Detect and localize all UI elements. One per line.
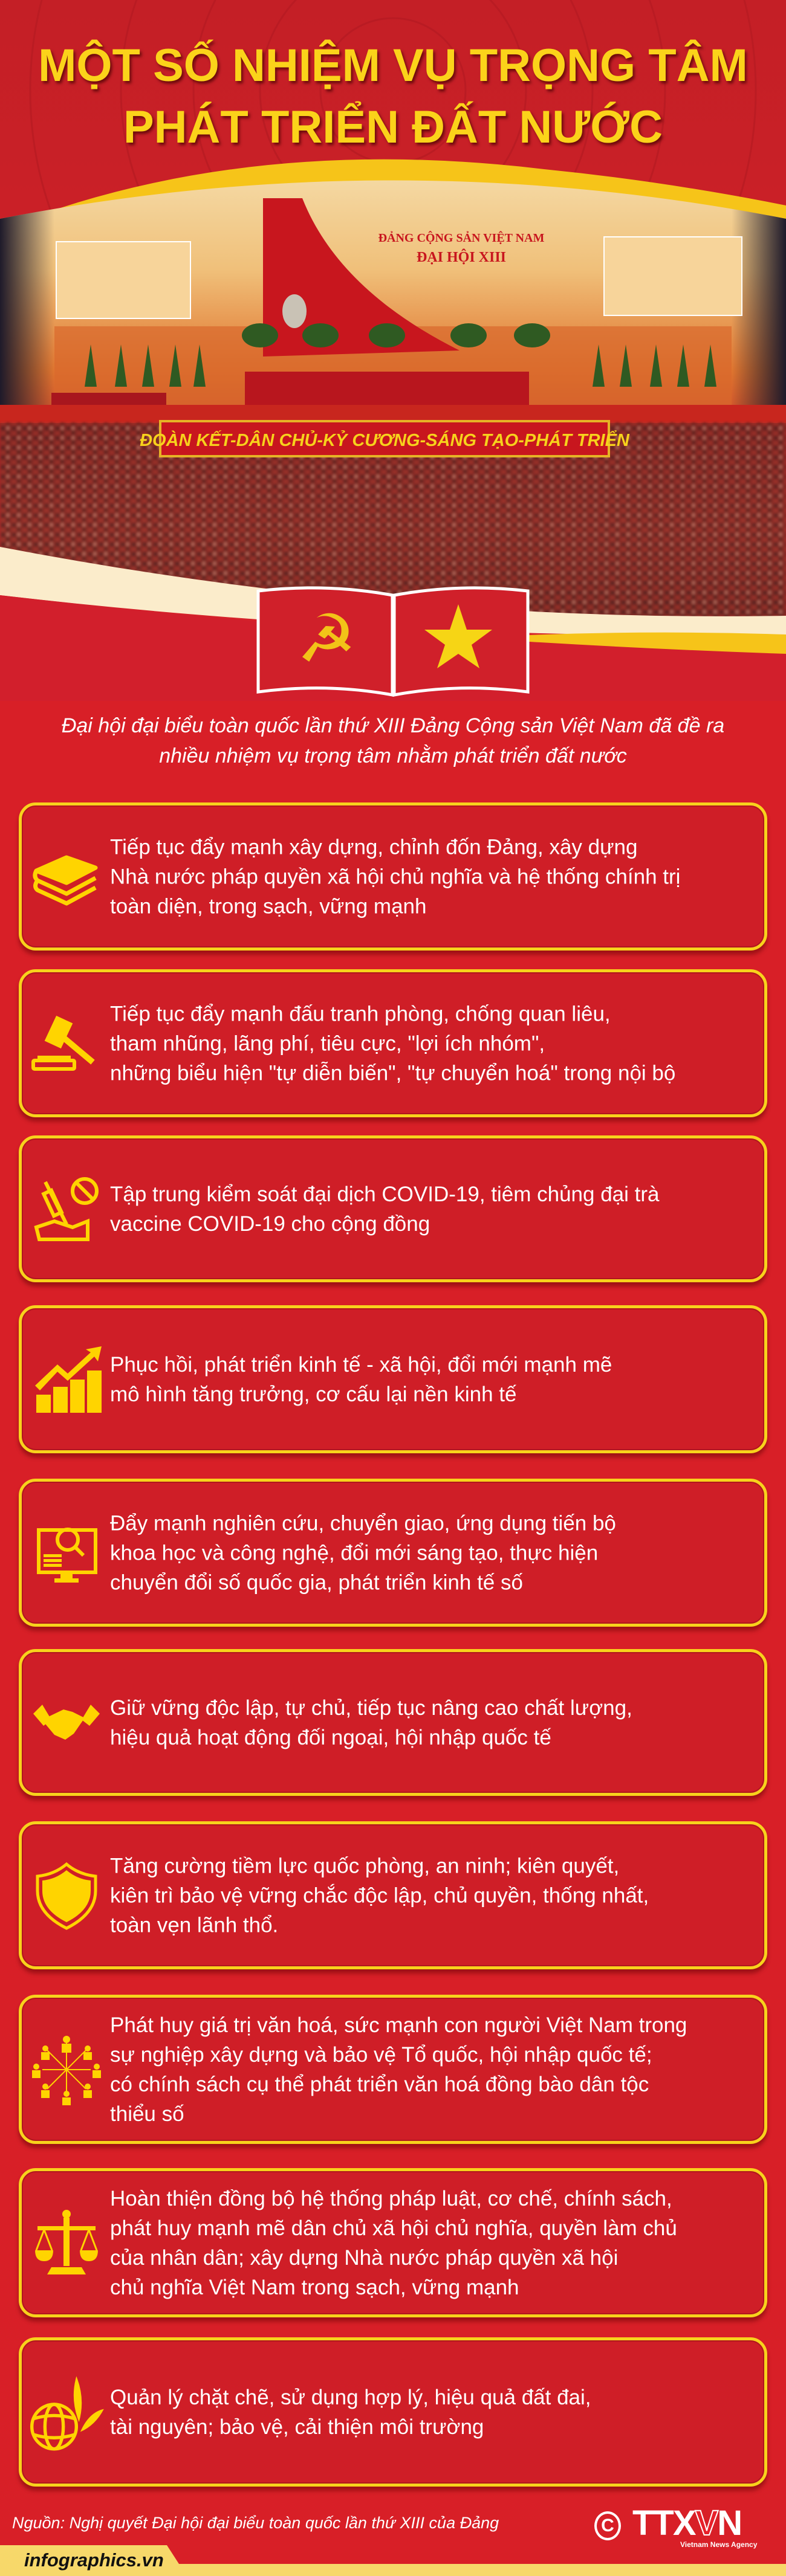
panel: task 3: vaccine COVID-19 cho cộng đồng [110, 1212, 430, 1235]
panel: task 8: sự nghiệp xây dựng và bảo vệ Tổ quốc, hội nhập quốc tế; [110, 2042, 652, 2067]
footer band: infographics.vn: infographics.vn [24, 2549, 164, 2571]
photo: congress hall [0, 180, 786, 616]
panel: task 8 [19, 1995, 767, 2144]
panel: task 8: có chính sách cụ thể phát triển văn hoá đồng bào dân tộc [110, 2073, 649, 2096]
photo: congress hall: ĐẠI HỘI XIII [417, 250, 506, 265]
icon: people circle [32, 2036, 101, 2105]
subtitle [62, 714, 724, 767]
subtitle: nhiều nhiệm vụ trọng tâm nhằm phát triển đất nước [159, 744, 627, 767]
icon: copyright: C [601, 2516, 614, 2536]
panel: task 5 [19, 1479, 767, 1627]
panel: task 2: tham nhũng, lãng phí, tiêu cực, "lợi ích nhóm", [110, 1031, 545, 1055]
panel: task 6 [19, 1649, 767, 1796]
panel: task 7: Tăng cường tiềm lực quốc phòng, an ninh; kiên quyết, [110, 1854, 619, 1877]
panel: task 1 [19, 802, 767, 951]
icon: scales [35, 2210, 98, 2274]
icon: books [33, 856, 98, 905]
photo: congress hall: ĐẢNG CỘNG SẢN VIỆT NAM [378, 231, 545, 245]
panel: task 4 [19, 1305, 767, 1453]
flag: Vietnam [394, 588, 528, 695]
photo: congress hall: ĐOÀN KẾT-DÂN CHỦ-KỶ CƯƠNG-SÁNG TẠO-PHÁT TRIỂN [140, 429, 630, 450]
icon: handshake [33, 1705, 100, 1740]
panel: task 3: Tập trung kiểm soát đại dịch COVID-19, tiêm chủng đại trà [110, 1182, 659, 1206]
panel: task 6: hiệu quả hoạt động đối ngoại, hội nhập quốc tế [110, 1726, 551, 1749]
header background with photo, swooshes and flags [0, 0, 786, 697]
panel: task 9: phát huy mạnh mẽ dân chủ xã hội chủ nghĩa, quyền làm chủ [110, 2216, 677, 2239]
footer band: infographics.vn [0, 2545, 786, 2576]
panel: task 7: kiên trì bảo vệ vững chắc độc lập, chủ quyền, thống nhất, [110, 1884, 649, 1907]
panel: task 10: tài nguyên; bảo vệ, cải thiện môi trường [110, 2415, 484, 2439]
icon: copyright [594, 2511, 621, 2540]
panel: task 9: của nhân dân; xây dựng Nhà nước pháp quyền xã hội [110, 2245, 618, 2270]
title [38, 40, 749, 153]
panel: task 5: Đẩy mạnh nghiên cứu, chuyển giao, ứng dụng tiến bộ [110, 1511, 616, 1535]
panel: task 4: Phục hồi, phát triển kinh tế - xã hội, đổi mới mạnh mẽ [110, 1352, 612, 1377]
icon: gavel [31, 1015, 95, 1071]
panel: task 7: toàn vẹn lãnh thổ. [110, 1913, 278, 1937]
panel: task 2: Tiếp tục đẩy mạnh đấu tranh phòng, chống quan liêu, [110, 1002, 611, 1025]
panel: task 9 [19, 2168, 767, 2317]
flags [258, 588, 528, 695]
icon: growth chart [35, 1346, 102, 1413]
panel: task 5: chuyển đổi số quốc gia, phát triển kinh tế số [110, 1570, 523, 1594]
icon: computer analytics [37, 1528, 97, 1583]
panel: task 3 [19, 1135, 767, 1282]
panel: task 1: Nhà nước pháp quyền xã hội chủ nghĩa và hệ thống chính trị [110, 865, 680, 888]
panel: task 10: Quản lý chặt chẽ, sử dụng hợp lý, hiệu quả đất đai, [110, 2386, 591, 2409]
yellow arc above photo [0, 160, 786, 254]
panel: task 10 [19, 2337, 767, 2487]
panel: task 7 [19, 1821, 767, 1969]
panel: task 9: chủ nghĩa Việt Nam trong sạch, vững mạnh [110, 2276, 519, 2299]
panel: task 4: mô hình tăng trưởng, cơ cấu lại nền kinh tế [110, 1383, 516, 1406]
panel: task 2 [19, 969, 767, 1117]
cream and yellow swooshes [0, 547, 786, 635]
panel: task 6: Giữ vững độc lập, tự chủ, tiếp tục nâng cao chất lượng, [110, 1696, 632, 1720]
logo: TTXVN [594, 2503, 757, 2549]
panel: task 1: toàn diện, trong sạch, vững mạnh [110, 894, 426, 918]
icon: vaccine [34, 1177, 99, 1241]
icon: shield [36, 1862, 97, 1930]
flag: party [258, 588, 392, 695]
panel: task 2: những biểu hiện "tự diễn biến", "tự chuyển hoá" trong nội bộ [110, 1061, 675, 1085]
title: MỘT SỐ NHIỆM VỤ TRỌNG TÂM [38, 40, 748, 91]
source note: Nguồn: Nghị quyết Đại hội đại biểu toàn quốc lần thứ XIII của Đảng [12, 2514, 499, 2532]
flag: party: ☭ [297, 600, 356, 677]
subtitle: Đại hội đại biểu toàn quốc lần thứ XIII Đảng Cộng sản Việt Nam đã đề ra [62, 714, 724, 737]
panel: task 1: Tiếp tục đẩy mạnh xây dựng, chỉnh đốn Đảng, xây dựng [110, 835, 637, 859]
panel: task 5: khoa học và công nghệ, đổi mới sáng tạo, thực hiện [110, 1541, 598, 1564]
wordmark: TTXVN [632, 2503, 741, 2543]
icon: globe with leaves [30, 2376, 104, 2451]
panel: task 8: Phát huy giá trị văn hoá, sức mạnh con người Việt Nam trong [110, 2013, 687, 2036]
panel: task 8: thiểu số [110, 2102, 184, 2126]
logo: TTXVN: Vietnam News Agency [680, 2540, 757, 2549]
title: PHÁT TRIỂN ĐẤT NƯỚC [123, 102, 663, 153]
panel: task 9: Hoàn thiện đồng bộ hệ thống pháp luật, cơ chế, chính sách, [110, 2186, 672, 2210]
